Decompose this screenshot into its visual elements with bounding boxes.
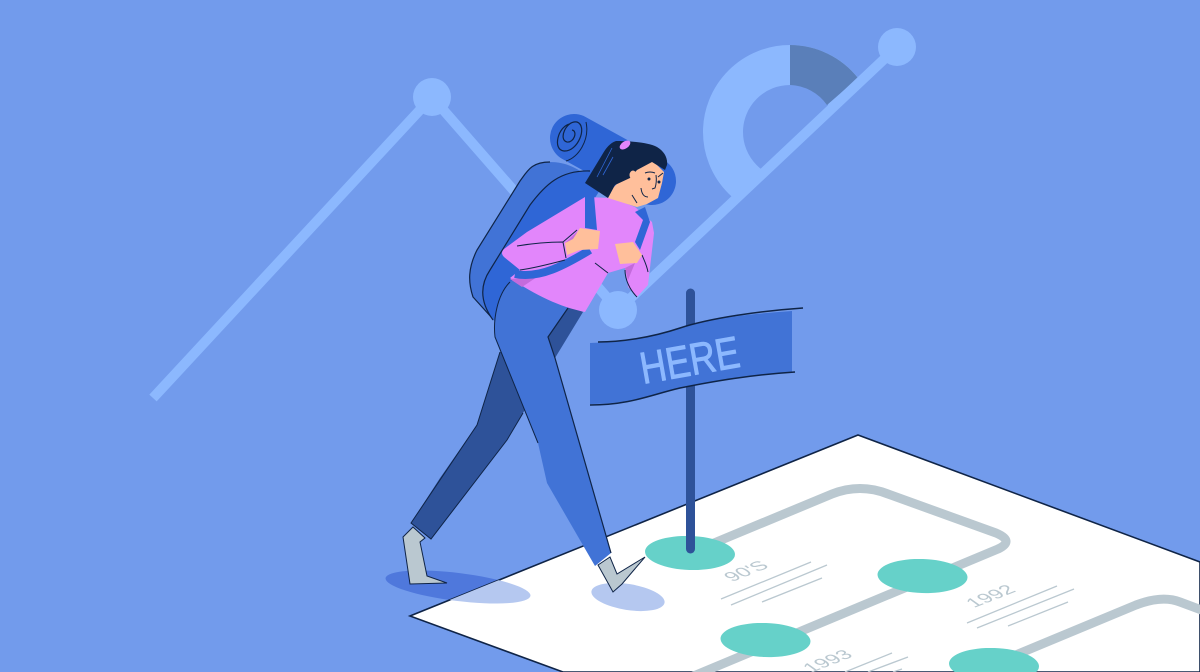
- back leg: [411, 300, 583, 539]
- timeline labels: [719, 558, 1021, 672]
- hair: [585, 141, 667, 198]
- front leg: [495, 275, 611, 566]
- timeline labels: 1992: [961, 582, 1021, 611]
- shoulder strap right: [635, 207, 650, 250]
- sleeve lines: [517, 230, 648, 297]
- left hand: [565, 228, 600, 255]
- under-arm strap: [515, 250, 590, 275]
- timeline labels: 90'S: [719, 558, 774, 585]
- line chart: [153, 28, 916, 398]
- hair highlights: [597, 148, 613, 177]
- timeline path: [660, 488, 1200, 672]
- timeline nodes: [644, 534, 1040, 672]
- flag: [590, 308, 803, 405]
- ear: [630, 170, 636, 180]
- back shoe: [403, 527, 447, 584]
- shoulder strap left: [585, 195, 597, 230]
- shadow of front foot: [589, 578, 667, 616]
- flag label: HERE: [636, 326, 743, 394]
- backpack: [470, 162, 600, 322]
- sweater: [502, 197, 654, 312]
- timeline text lines: [721, 562, 1074, 672]
- head: [585, 139, 667, 207]
- timeline map: [384, 435, 1200, 672]
- donut chart: [723, 45, 858, 199]
- front shoe: [598, 557, 645, 592]
- sleeping roll: [557, 122, 652, 181]
- right hand: [615, 242, 642, 264]
- hair tie: [618, 139, 632, 151]
- face details: [632, 172, 663, 203]
- shadow of back foot: [384, 564, 532, 610]
- signpost pole: [686, 293, 695, 549]
- shadow on map: [450, 580, 530, 604]
- character: [403, 122, 667, 592]
- sweater fold shadow: [510, 232, 635, 287]
